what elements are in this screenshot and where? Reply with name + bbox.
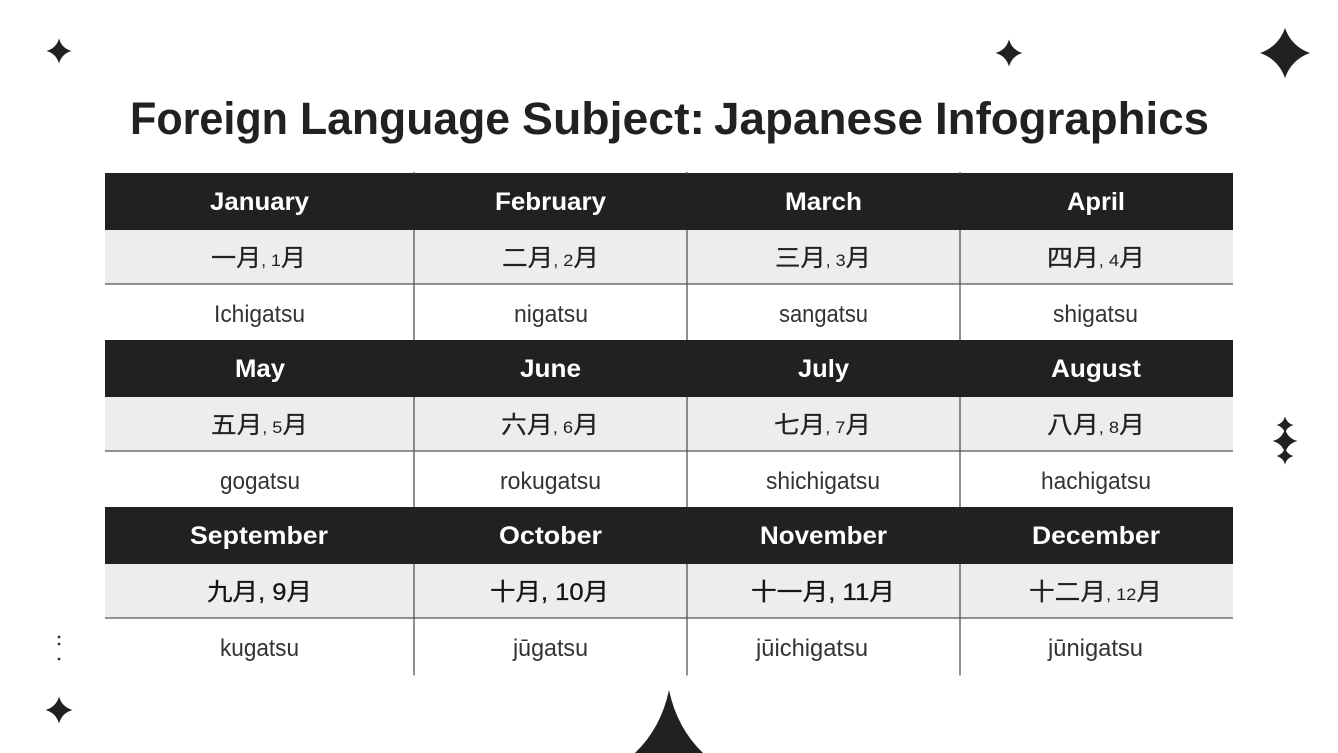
title: Foreign	[130, 93, 288, 144]
cell: March: March	[785, 188, 862, 216]
title: Language	[300, 93, 510, 144]
cell: September: September	[190, 522, 328, 550]
cell: December: 十二月 , 12月	[1029, 579, 1162, 606]
cell: October: jūgatsu	[512, 635, 588, 662]
icon: large sparkle cropped at bottom edge	[635, 690, 703, 753]
cell: May: 五月, 5月	[211, 412, 308, 439]
cell: August: August	[1051, 355, 1142, 383]
cell: October	[490, 522, 609, 662]
cell: February: February	[495, 188, 606, 216]
cell: July: July	[798, 355, 849, 383]
cell: August	[1041, 355, 1151, 495]
icon: vertical dots left	[58, 636, 60, 660]
cell: June: June	[520, 355, 581, 383]
table row bands and rules	[105, 172, 1233, 676]
cell: June: rokugatsu	[500, 468, 601, 495]
cell: December	[1029, 522, 1162, 662]
cell: April: shigatsu	[1053, 301, 1138, 328]
cell: November: jūichigatsu	[755, 635, 868, 662]
cell: January: January	[210, 188, 309, 216]
cell: September	[190, 522, 328, 662]
cell: March: sangatsu	[779, 301, 868, 328]
table: Japanese months	[105, 172, 1233, 676]
cell: July: 七月, 7月	[774, 412, 871, 439]
icon: triple sparkle right	[1272, 416, 1298, 464]
cell: October: October	[499, 522, 602, 550]
cell: April: April	[1067, 188, 1125, 216]
cell: March: 三月, 3月	[775, 245, 871, 272]
cell: February: nigatsu	[514, 301, 588, 328]
cell: October: 十月, 10月	[490, 579, 609, 606]
cell: August: hachigatsu	[1041, 468, 1151, 495]
cell: May: May	[235, 355, 285, 383]
cell: May	[211, 355, 308, 495]
cell: July	[766, 355, 880, 495]
title: Infographics	[935, 93, 1209, 144]
cell: July: shichigatsu	[766, 468, 880, 495]
cell: June: 六月, 6月	[501, 412, 599, 439]
icon: sparkle top left	[46, 38, 72, 64]
cell: February	[495, 188, 606, 328]
cell: June	[500, 355, 601, 495]
cell: January: 一月, 1月	[211, 245, 306, 272]
icon: sparkle bottom left	[46, 696, 72, 724]
title: Japanese	[714, 93, 923, 144]
cell: March	[775, 188, 871, 328]
cell: January	[210, 188, 309, 328]
cell: August: 八月, 8月	[1047, 412, 1145, 439]
cell: November: November	[760, 522, 887, 550]
cell: September: kugatsu	[220, 635, 299, 662]
cell: December: December	[1032, 522, 1160, 550]
cell: February: 二月, 2月	[502, 245, 599, 272]
title: Subject:	[522, 93, 705, 144]
cell: November: 十一月, 11月	[751, 579, 895, 606]
icon: sparkle top centre right	[996, 40, 1022, 66]
cell: September: 九月, 9月	[207, 579, 312, 606]
cell: November	[751, 522, 895, 662]
cell: May: gogatsu	[220, 468, 300, 495]
cell: January: Ichigatsu	[214, 301, 305, 328]
cell: December: jūnigatsu	[1047, 635, 1143, 662]
cell: April: 四月, 4月	[1047, 245, 1145, 272]
cell: April	[1047, 188, 1145, 328]
icon: large sparkle top right	[1260, 28, 1310, 78]
